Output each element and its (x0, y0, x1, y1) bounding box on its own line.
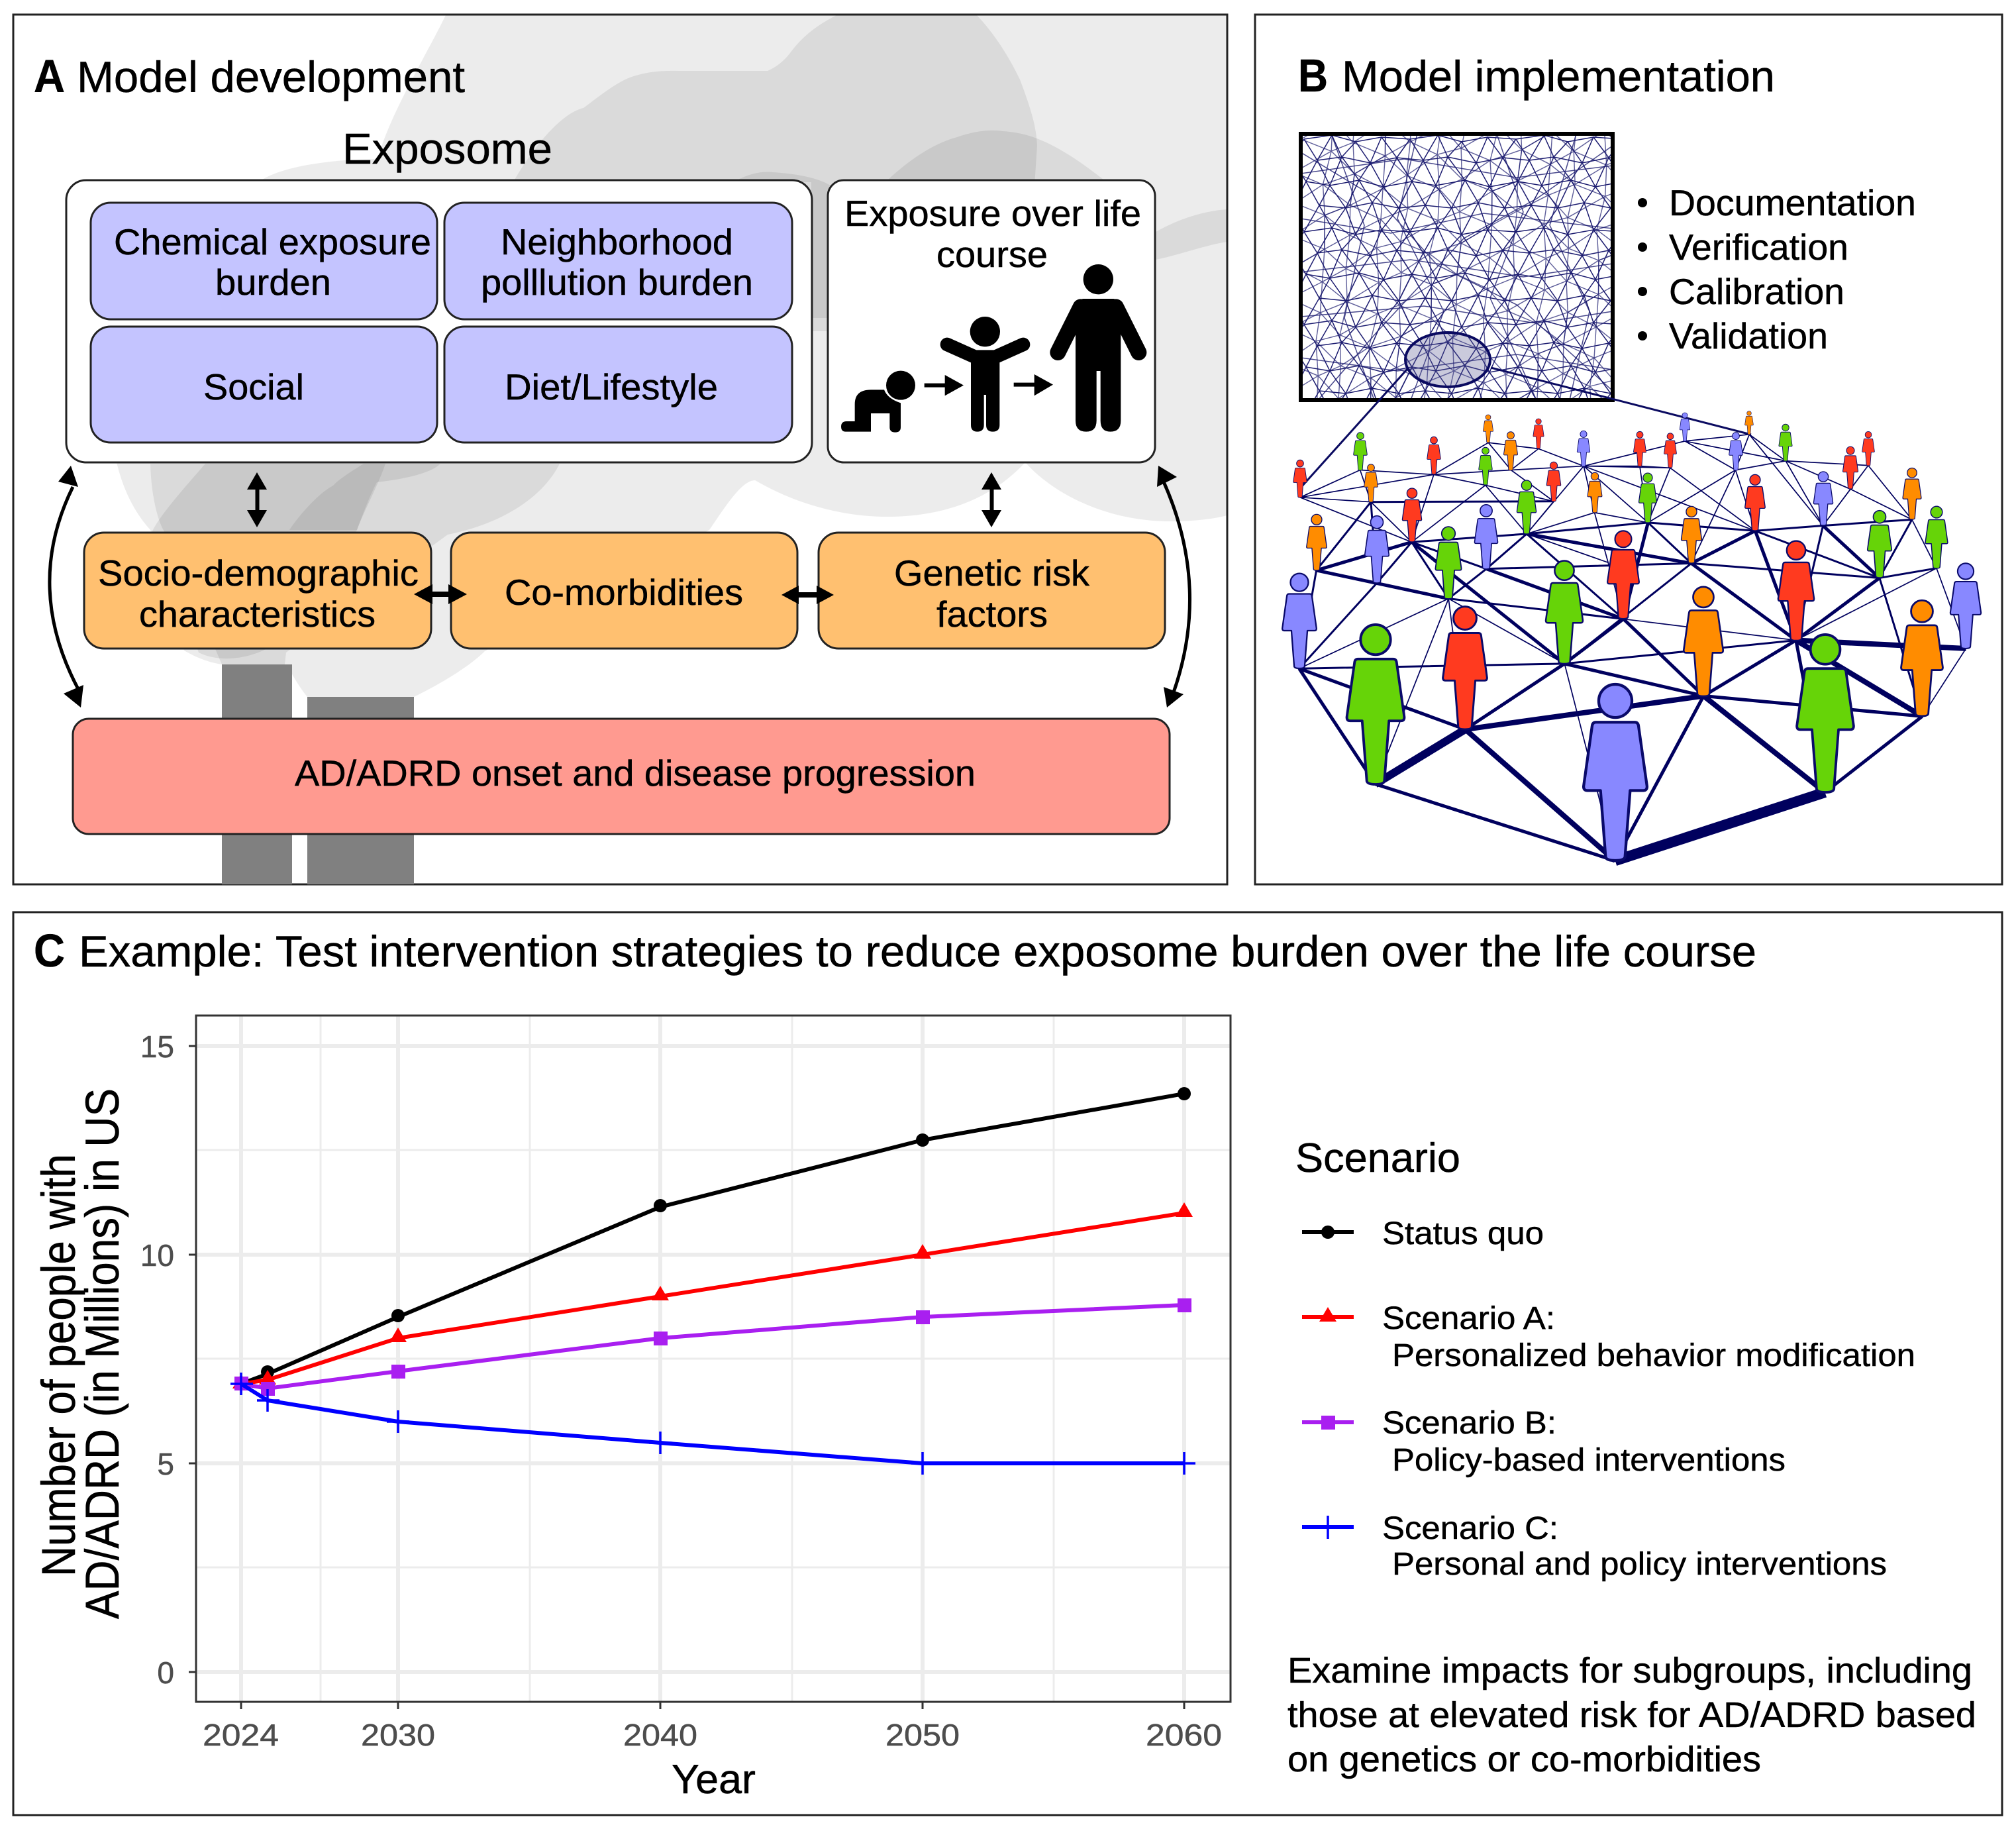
legend item: scenario C: Personal and policy interventions (1392, 1547, 1887, 1582)
social network of people (1282, 411, 1981, 861)
x axis tick labels (203, 1718, 1222, 1752)
note text: on genetics or co-morbidities (1287, 1740, 1761, 1779)
x axis tick labels: 2050 (885, 1718, 960, 1752)
x axis tick labels: 2040 (623, 1718, 697, 1752)
y axis tick labels: 0 (157, 1655, 174, 1690)
box: AD/ADRD onset: AD/ADRD onset and disease progression (295, 753, 976, 794)
x axis title: Year (672, 1757, 756, 1803)
legend item: scenario A: Scenario A: (1382, 1301, 1555, 1336)
bullet list: Calibration (1669, 271, 1844, 312)
heading: Model implementation (1342, 52, 1775, 101)
legend item: scenario C: Scenario C: (1382, 1511, 1558, 1546)
box: diet lifestyle: Diet/Lifestyle (505, 366, 718, 407)
legend item: scenario B (1302, 1406, 1786, 1478)
legend item: scenario C (1302, 1511, 1887, 1582)
bullet list: Validation (1669, 315, 1828, 356)
heading: A (34, 50, 65, 102)
y axis title: Number of people with (32, 1154, 85, 1577)
box: chemical exposure: Chemical exposure (114, 221, 431, 262)
series: scenario B (234, 1298, 1191, 1396)
box: socio-demographic: Socio-demographic (98, 552, 419, 594)
note text (1287, 1651, 1976, 1779)
series: status quo (241, 1087, 1191, 1384)
heading: Model development (77, 52, 465, 101)
box: socio-demographic (84, 533, 431, 649)
box: co-morbidities: Co-morbidities (505, 572, 743, 613)
bullet list (1638, 182, 1916, 356)
panel: exposure over life course: Exposure over life (844, 193, 1141, 234)
network mesh inset (1299, 132, 1615, 402)
bullet list: Documentation (1669, 182, 1916, 223)
box: social (91, 327, 437, 443)
box: socio-demographic: characteristics (139, 594, 376, 635)
x axis tick labels: 2024 (203, 1718, 279, 1752)
line chart (32, 1016, 1231, 1803)
legend item: scenario A (1302, 1301, 1915, 1373)
heading: Example: Test intervention strategies to reduce exposome burden over the life course (79, 927, 1756, 976)
person figures, back to front (1282, 411, 1981, 861)
box: genetic risk: Genetic risk (894, 552, 1089, 594)
legend (1295, 1135, 1915, 1582)
box: co-morbidities (451, 533, 797, 649)
panel: A Model development (13, 15, 1227, 884)
box: neighborhood pollution (444, 203, 792, 319)
box: AD/ADRD onset (73, 719, 1170, 834)
note text: Examine impacts for subgroups, including (1287, 1651, 1972, 1691)
y axis tick labels: 15 (140, 1029, 174, 1064)
panel: Exposome group box (66, 180, 812, 462)
series: scenario A (232, 1202, 1193, 1388)
legend item: scenario B: Policy-based interventions (1392, 1443, 1786, 1478)
legend title: Scenario (1295, 1135, 1460, 1181)
y axis tick labels (140, 1029, 174, 1690)
series: scenario C (230, 1373, 1195, 1475)
box: genetic risk: factors (936, 594, 1048, 635)
x axis tick labels: 2060 (1146, 1718, 1222, 1752)
y axis tick labels: 10 (140, 1238, 174, 1273)
arrows (50, 466, 1189, 707)
box: genetic risk (819, 533, 1165, 649)
bullet list: Verification (1669, 227, 1848, 268)
box: neighborhood pollution: polllution burden (481, 262, 753, 303)
box: social: Social (203, 366, 304, 407)
box: neighborhood pollution: Neighborhood (501, 221, 733, 262)
legend item: scenario A: Personalized behavior modification (1392, 1338, 1915, 1373)
box: chemical exposure (91, 203, 437, 319)
legend item: scenario B: Scenario B: (1382, 1406, 1556, 1441)
y axis title: AD/ADRD (in Millions) in US (76, 1088, 129, 1619)
panel: exposure over life course (828, 180, 1155, 462)
heading: B (1298, 50, 1328, 101)
heading: C (34, 925, 65, 976)
panel: C Example (13, 912, 2002, 1815)
x axis tick labels: 2030 (361, 1718, 435, 1752)
y axis title (32, 1088, 129, 1619)
zoom connector lines (1301, 368, 1751, 487)
panel: B Model implementation (1254, 13, 2003, 885)
legend item: status quo (1302, 1216, 1544, 1251)
note text: those at elevated risk for AD/ADRD based (1287, 1695, 1976, 1735)
heading: Exposome: Exposome (342, 125, 552, 173)
panel: exposure over life course: course (936, 234, 1048, 275)
box: chemical exposure: burden (215, 262, 331, 303)
y axis tick labels: 5 (157, 1447, 174, 1481)
icon: life course figures (841, 264, 1138, 433)
chimneys (222, 664, 414, 884)
legend item: status quo: Status quo (1382, 1216, 1544, 1251)
box: diet lifestyle (444, 327, 792, 443)
smoke plume background (117, 15, 1227, 697)
